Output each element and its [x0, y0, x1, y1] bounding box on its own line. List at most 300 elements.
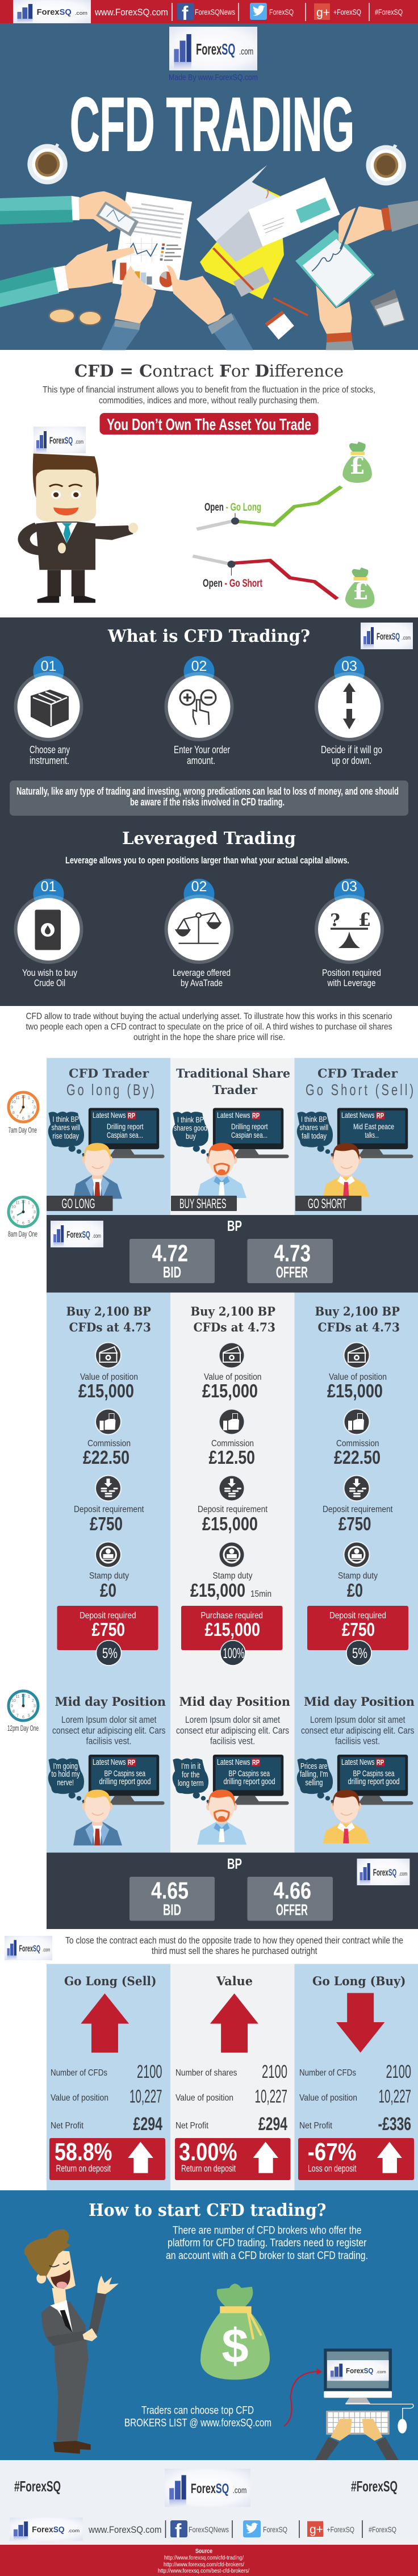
- loss callout: -67%: [308, 2138, 357, 2166]
- heading: How to start CFD trading?: [89, 2201, 326, 2220]
- column: CFD go short costs: £22.50: [334, 1447, 381, 1468]
- midday column 3: Latest News: [341, 1758, 375, 1767]
- column: traditional costs: £15,000: [202, 1513, 258, 1534]
- heading: leveraged trading: Leveraged Trading: [122, 829, 296, 849]
- logo: ForexSQ: [66, 1229, 90, 1240]
- column: traditional costs: CFDs at 4.73: [193, 1320, 275, 1334]
- midday column 3: Mid day Position: [304, 1694, 415, 1709]
- broker text: platform for CFD trading. Traders need to register: [168, 2237, 367, 2249]
- midday column 2: consect etur adipiscing elit. Cars: [176, 1725, 289, 1736]
- midday column 2: [173, 1694, 290, 1844]
- icon: twitter: [243, 2520, 261, 2537]
- BP price band: 4.65 / 4.66: [47, 1853, 418, 1929]
- hashtag: #ForexSQ: [369, 2525, 396, 2534]
- midday column 3: drilling report good: [348, 1777, 400, 1786]
- source bar: http://www.forexsq.com/best-cfd-brokers/: [158, 2567, 249, 2574]
- leverage step 1: crude oil: You wish to buy: [22, 968, 78, 978]
- midday column 2: Lorem Ipsum dolor sit amet: [185, 1714, 280, 1725]
- risk note: [10, 780, 408, 816]
- bid box: BID: [163, 1901, 181, 1919]
- clock: 7am: 3: [34, 1105, 36, 1110]
- icon: google plus: g+: [310, 2523, 323, 2536]
- results column 3: Go Long (Buy): [312, 1974, 406, 1988]
- bid box: [129, 1877, 215, 1921]
- step 2: order amount: 02: [191, 658, 207, 674]
- column heading: CFD trader go long: CFD Trader: [69, 1066, 149, 1080]
- scenario text: outright in the hope the share price will rise.: [133, 1033, 285, 1042]
- midday column 1: nerve!: [57, 1778, 74, 1788]
- scene: buy shares at 7am: [171, 1108, 289, 1212]
- icon: facebook: f: [175, 2520, 182, 2542]
- leverage step 2: scales: Leverage offered: [173, 968, 231, 978]
- clock: 12pm: 10: [11, 1699, 16, 1703]
- panel: how to start: [0, 2190, 418, 2460]
- google handle: +ForexSQ: [327, 2525, 354, 2534]
- column: CFD go long costs: CFDs at 4.73: [69, 1320, 151, 1334]
- scene: buy shares at 7am: shares good: [174, 1124, 207, 1133]
- scene: buy shares at 7am: Drilling report: [231, 1122, 268, 1131]
- logo: ForexSQ: [196, 40, 235, 58]
- clock: 7am: [8, 1092, 38, 1134]
- call to action text: Traders can choose top CFD: [141, 2405, 254, 2416]
- column heading: CFD trader go long: [66, 1066, 154, 1099]
- icon: stamp duty: [343, 1542, 370, 1568]
- midday column 2: long term: [178, 1779, 203, 1788]
- results column 1: 2100: [137, 2061, 162, 2082]
- column: CFD go long costs: Buy 2,100 BP: [66, 1304, 151, 1318]
- midday column 3: falling, I'm: [300, 1770, 328, 1779]
- column: CFD go short costs: Value of position: [329, 1372, 387, 1382]
- purchase callout: 100%: [223, 1646, 244, 1661]
- logo: ForexSQ: [377, 631, 400, 642]
- clock: 7am: 12: [21, 1095, 26, 1099]
- midday column 3: [297, 1694, 415, 1843]
- icon: deposit requirement: [218, 1475, 245, 1502]
- offer box: [248, 1239, 333, 1283]
- scene: buy shares at 7am: I think BP: [177, 1115, 204, 1124]
- column: CFD go long costs: £0: [100, 1580, 116, 1601]
- results column 1: £294: [133, 2114, 162, 2134]
- step 2: order amount: Enter Your order: [174, 744, 230, 755]
- leverage step 3: position balance: 03: [341, 879, 357, 895]
- column heading: traditional share trader: [176, 1066, 290, 1097]
- results column 3: [298, 1974, 414, 2180]
- logo: [357, 1859, 409, 1885]
- icon: commission: [95, 1409, 122, 1435]
- logo: ForexSQ: [49, 435, 73, 446]
- midday column 3: facilisis vest.: [335, 1736, 380, 1746]
- midday column 2: Latest News: [217, 1758, 250, 1767]
- website: www.ForexSQ.com: [88, 2524, 161, 2535]
- midday column 1: [48, 1694, 166, 1846]
- clock: 8am: 6: [22, 1221, 24, 1226]
- loss callout: Loss on deposit: [308, 2163, 357, 2174]
- scene: go short at 7am: Latest News: [341, 1110, 375, 1120]
- scene: go short at 7am: shares will: [300, 1122, 328, 1132]
- return callout: 3.00%: [179, 2138, 237, 2166]
- scene: go long at 7am: RP: [128, 1111, 135, 1120]
- footer logo: ForexSQ: [32, 2525, 65, 2535]
- midday column 1: I'm going: [53, 1762, 78, 1771]
- column: CFD go long costs: [57, 1304, 158, 1665]
- step 1: choose instrument: Choose any: [30, 744, 70, 755]
- scene: go long at 7am: shares will: [51, 1122, 80, 1132]
- column heading: CFD trader go short: CFD Trader: [317, 1066, 398, 1080]
- step 2: order amount: [166, 656, 232, 766]
- heading: What is CFD Trading?: [107, 627, 310, 646]
- results column 1: [49, 1974, 165, 2180]
- clock: 12pm: 8: [12, 1710, 15, 1714]
- hero illustration: desk with hands and documents: [0, 143, 418, 350]
- column: CFD go short costs: £15,000: [327, 1380, 383, 1401]
- clock: 12pm: 4: [32, 1710, 34, 1714]
- footer logo: [10, 2517, 83, 2541]
- icon: google plus: [314, 3, 330, 20]
- clock: 8am: 3: [34, 1210, 36, 1214]
- facebook handle: ForexSQNews: [189, 2525, 229, 2534]
- clock: 8am: [8, 1197, 38, 1238]
- offer box: 4.66: [274, 1877, 311, 1904]
- column: CFD go short costs: £0: [347, 1580, 363, 1601]
- column: traditional costs: £12.50: [209, 1447, 255, 1468]
- intro text: This type of financial instrument allows you to benefit from the fluctuation in the price of stocks,: [43, 385, 375, 395]
- column: traditional costs: Value of position: [204, 1372, 261, 1382]
- icon: stamp duty: [95, 1542, 122, 1568]
- clock: 7am: 1: [28, 1096, 30, 1100]
- column: traditional costs: £15,000: [202, 1380, 258, 1401]
- scene: go short at 7am: I think BP: [301, 1114, 327, 1124]
- return callout: [49, 2138, 165, 2180]
- midday column 1: RP: [128, 1758, 135, 1767]
- bid box: 4.65: [151, 1877, 189, 1904]
- deposit callout: Deposit required: [80, 1611, 136, 1621]
- clock: 8am: 10: [11, 1205, 16, 1209]
- scene: go short at 7am: RP: [377, 1111, 384, 1120]
- column: CFD go short costs: Commission: [336, 1439, 379, 1448]
- heading: CFD = Contract For Difference: [74, 361, 344, 381]
- line chart: go short: [193, 556, 375, 608]
- BP price band: 4.65 / 4.66: BP: [227, 1855, 242, 1872]
- twitter handle: ForexSQ: [269, 8, 294, 16]
- clock: 8am: 2: [32, 1205, 34, 1209]
- facebook handle: ForexSQNews: [195, 8, 235, 16]
- logo: [13, 0, 91, 23]
- icon: commission: [343, 1409, 370, 1435]
- step 1: choose instrument: instrument.: [30, 755, 69, 766]
- money bag: [200, 2283, 270, 2379]
- icon: commission: [218, 1409, 245, 1435]
- source bar: http://www.forexsq.com/cfd-brokers/: [164, 2561, 244, 2568]
- line chart: go long: £: [349, 453, 365, 479]
- scene: long term: [173, 1755, 289, 1844]
- clock: 12pm: 2: [32, 1699, 34, 1703]
- midday column 2: RP: [252, 1758, 260, 1767]
- arrow down: [336, 1993, 384, 2053]
- return callout: 58.8%: [55, 2138, 112, 2166]
- results column 2: Number of shares: [175, 2068, 237, 2078]
- logo: .com: [402, 635, 411, 641]
- clock: 7am: 2: [32, 1100, 34, 1104]
- twitter handle: ForexSQ: [263, 2525, 287, 2534]
- source bar: http://www.forexsq.com/cfd-trading/: [164, 2554, 244, 2561]
- logo: ForexSQ: [191, 2481, 229, 2496]
- bid box: [129, 1239, 215, 1283]
- icon: deposit requirement: [343, 1475, 370, 1502]
- call to action text: [124, 2405, 271, 2429]
- deposit callout: [57, 1606, 158, 1665]
- scene: go long at 7am: I think BP: [52, 1114, 79, 1124]
- bid box: BID: [163, 1263, 181, 1281]
- clock: 8am: 9: [11, 1210, 13, 1214]
- column: CFD go short costs: [307, 1304, 408, 1665]
- midday column 1: Mid day Position: [55, 1694, 166, 1709]
- clock: 12pm: [7, 1691, 39, 1732]
- clock: 7am: 10: [11, 1100, 16, 1104]
- column: CFD go long costs: Commission: [87, 1439, 131, 1448]
- midday column 2: BP Caspins sea: [228, 1769, 270, 1778]
- scene: go long at 7am: Latest News: [93, 1110, 126, 1120]
- results column 1: Go Long (Sell): [64, 1974, 157, 1988]
- leverage step 2: scales: by AvaTrade: [181, 978, 223, 988]
- icon: value of position: [95, 1342, 122, 1369]
- line chart: go long: [197, 441, 372, 529]
- logo: .com: [43, 1947, 50, 1952]
- logo: .com: [239, 46, 253, 57]
- leverage step 3: position balance: £: [358, 909, 371, 930]
- column: traditional costs: [181, 1304, 283, 1665]
- leverage step 2: scales: [166, 879, 232, 988]
- midday column 1: consect etur adipiscing elit. Cars: [52, 1725, 166, 1736]
- logo: .com: [233, 2486, 246, 2495]
- top social bar: [0, 0, 418, 24]
- clock: 7am: 9: [11, 1105, 13, 1110]
- panel: what is CFD trading: [0, 617, 418, 1006]
- line chart: go long: Open - Go Long: [204, 502, 261, 513]
- column heading: traditional share trader: Trader: [212, 1083, 258, 1097]
- return callout: Return on deposit: [56, 2163, 111, 2174]
- midday column 1: to hold my: [51, 1770, 80, 1779]
- money bag: $: [221, 2319, 249, 2373]
- clock: 8am: 5: [28, 1220, 30, 1224]
- bid box: 4.72: [152, 1239, 188, 1267]
- results column 1: Net Profit: [51, 2121, 83, 2131]
- leverage step 3: position balance: [316, 879, 382, 988]
- logo: [169, 27, 257, 70]
- scene: buy shares at 7am: Caspian sea...: [231, 1130, 267, 1139]
- icon: stamp duty: [218, 1542, 245, 1568]
- results column 2: Value: [216, 1974, 253, 1988]
- clock: 8am: 1: [28, 1201, 30, 1205]
- midday column 1: Latest News: [93, 1758, 126, 1767]
- computer with logo: ForexSQ: [346, 2367, 373, 2375]
- step 2: order amount: amount.: [187, 755, 215, 766]
- source bar: Source: [195, 2548, 212, 2555]
- midday column 2: Mid day Position: [179, 1694, 290, 1709]
- offer box: 4.73: [274, 1239, 311, 1267]
- icon: deposit requirement: [95, 1475, 122, 1502]
- scene: buy shares at 7am: RP: [252, 1111, 260, 1120]
- column: traditional costs: £15,000: [190, 1580, 245, 1601]
- midday column 2: facilisis vest.: [210, 1736, 255, 1746]
- column: CFD go long costs: Value of position: [80, 1372, 138, 1382]
- computer with logo: .com: [376, 2370, 386, 2374]
- callout banner: You Don’t Own The Asset You Trade: [107, 416, 311, 434]
- scene: go short at 7am: Mid East peace: [353, 1122, 394, 1131]
- broker text: There are number of CFD brokers who offer the: [173, 2224, 361, 2237]
- website: www.ForexSQ.com: [94, 7, 168, 18]
- BP price band: 4.72 / 4.73: [47, 1215, 418, 1293]
- scene: go short at 7am: GO SHORT: [308, 1196, 346, 1212]
- comparison column backgrounds: [47, 1058, 418, 2190]
- column: traditional costs: Stamp duty: [212, 1571, 253, 1581]
- column: CFD go long costs: £22.50: [83, 1447, 129, 1468]
- clock: 7am: 5: [28, 1116, 30, 1119]
- column: traditional costs: Deposit requirement: [198, 1505, 268, 1514]
- clock: 7am: 4: [32, 1111, 34, 1115]
- purchase callout: [181, 1606, 283, 1665]
- column: CFD go short costs: Deposit requirement: [323, 1505, 393, 1514]
- column: CFD go short costs: Buy 2,100 BP: [315, 1304, 400, 1318]
- footer logo: .com: [68, 2528, 80, 2533]
- hero panel: [0, 0, 418, 350]
- scene: go long at 7am: [47, 1108, 165, 1212]
- results column 2: Value of position: [175, 2093, 233, 2103]
- scene: go short at 7am: talks...: [365, 1130, 379, 1139]
- icon: facebook: f: [182, 3, 189, 24]
- clock: 8am: 11: [15, 1201, 20, 1205]
- results column 3: Number of CFDs: [299, 2068, 356, 2078]
- purchase callout: £15,000: [204, 1619, 260, 1640]
- logo: ForexSQ: [37, 7, 72, 17]
- results column 3: Value of position: [299, 2093, 357, 2103]
- return callout: Return on deposit: [181, 2163, 236, 2174]
- column: CFD go long costs: £750: [90, 1513, 123, 1534]
- broker text: an account with a CFD broker to start CFD trading.: [166, 2250, 368, 2262]
- scene: buy shares at 7am: BUY SHARES: [179, 1196, 226, 1212]
- midday column 1: BP Caspins sea: [104, 1769, 146, 1778]
- results column 2: [175, 1974, 291, 2180]
- arrow up: [210, 1993, 258, 2053]
- column: traditional costs: 15min: [250, 1589, 271, 1599]
- computer with logo: [315, 2349, 413, 2460]
- source bar: [0, 2545, 418, 2576]
- cartoon businessman: [24, 453, 138, 603]
- hashtag left: #ForexSQ: [14, 2478, 61, 2495]
- clock: 7am: 6: [22, 1117, 24, 1121]
- clock: 12pm: 3: [34, 1704, 36, 1709]
- clock: 12pm: 6: [22, 1715, 24, 1719]
- results column 1: Number of CFDs: [51, 2068, 107, 2078]
- midday column 1: Lorem Ipsum dolor sit amet: [61, 1714, 157, 1725]
- results column 2: £294: [258, 2114, 287, 2134]
- leverage step 1: crude oil: 01: [41, 879, 56, 895]
- column: CFD go short costs: CFDs at 4.73: [318, 1320, 400, 1334]
- line chart: go short: £: [353, 578, 369, 605]
- column heading: CFD trader go short: Go Short (Sell): [306, 1082, 413, 1099]
- clock: 7am: 7am Day One: [8, 1125, 37, 1134]
- clock: 12pm: 12: [21, 1694, 26, 1698]
- logo: .com: [75, 10, 87, 16]
- leverage step 3: position balance: ?: [330, 911, 340, 930]
- closing text: [65, 1935, 403, 1956]
- clock: 12pm: 11: [15, 1695, 20, 1699]
- midday column 1: facilisis vest.: [86, 1736, 132, 1746]
- column heading: CFD trader go long: Go long (By): [66, 1082, 154, 1099]
- clock: 7am: 11: [15, 1096, 20, 1100]
- column: CFD go long costs: Deposit requirement: [74, 1505, 144, 1514]
- clock: 8am: 4: [32, 1216, 34, 1220]
- step 3: direction: 03: [341, 658, 357, 674]
- icon: facebook: [177, 3, 194, 24]
- clock: 12pm: 5: [28, 1714, 30, 1718]
- deposit callout: 5%: [352, 1646, 367, 1661]
- logo: [165, 2469, 250, 2507]
- offer box: OFFER: [276, 1263, 308, 1281]
- column: CFD go long costs: Stamp duty: [89, 1571, 129, 1581]
- logo: [361, 623, 413, 649]
- deposit callout: 5%: [102, 1646, 118, 1661]
- scene: go long at 7am: Drilling report: [107, 1122, 144, 1131]
- arrow to computer: [284, 2368, 322, 2426]
- clock: 12pm: 7: [16, 1714, 19, 1718]
- scene: buy shares at 7am: buy: [186, 1132, 196, 1141]
- logo: .com: [93, 1233, 101, 1239]
- results column 1: Value of position: [51, 2093, 108, 2103]
- intro text: commodities, indices and more, without really purchasing them.: [99, 396, 319, 406]
- step 1: choose instrument: [16, 656, 82, 766]
- leverage step 3: position balance: Position required: [322, 968, 381, 978]
- closing text: third must sell the shares he purchased outright: [152, 1945, 317, 1956]
- purchase callout: Purchase required: [201, 1611, 263, 1621]
- icon: value of position: [218, 1342, 245, 1369]
- callout banner: [100, 413, 318, 435]
- risk note: be aware if the risks involved in CFD trading.: [130, 796, 285, 808]
- midday column 3: RP: [377, 1758, 384, 1767]
- deposit callout: £750: [92, 1619, 125, 1640]
- column: traditional costs: Commission: [211, 1439, 254, 1448]
- broker text: [166, 2224, 368, 2262]
- scene: go long at 7am: GO LONG: [61, 1196, 95, 1212]
- step 3: direction: up or down.: [332, 755, 371, 766]
- results column 2: 2100: [262, 2061, 287, 2082]
- made by line: Made By www.ForexSQ.com: [169, 73, 258, 82]
- BP price band: 4.72 / 4.73: BP: [227, 1217, 242, 1234]
- scene: go short at 7am: fall today: [302, 1132, 327, 1141]
- deposit callout: Deposit required: [329, 1611, 386, 1621]
- footer: [0, 2460, 418, 2545]
- logo: [34, 427, 86, 453]
- clock: 8am: 12: [21, 1200, 26, 1204]
- return callout: [175, 2138, 291, 2180]
- results column 1: 10,227: [129, 2086, 162, 2106]
- offer box: [248, 1877, 333, 1921]
- column: CFD go short costs: £750: [338, 1513, 371, 1534]
- logo: .com: [75, 439, 83, 445]
- midday column 3: Prices are: [300, 1762, 327, 1771]
- midday column 2: drilling report good: [224, 1777, 275, 1786]
- call to action text: BROKERS LIST @ www.forexSQ.com: [124, 2418, 271, 2429]
- google handle: +ForexSQ: [333, 8, 361, 16]
- midday column 2: for the: [182, 1771, 200, 1780]
- column: traditional costs: Buy 2,100 BP: [191, 1304, 275, 1318]
- column: CFD go short costs: Stamp duty: [338, 1571, 378, 1581]
- midday column 3: selling: [306, 1778, 323, 1788]
- line chart: go short: Open - Go Short: [203, 578, 262, 590]
- leverage step 3: position balance: with Leverage: [327, 978, 376, 988]
- step 3: direction: Decide if it will go: [321, 744, 382, 755]
- scene: hold nerve: [48, 1755, 165, 1846]
- clock: 12pm: 12pm Day One: [7, 1723, 39, 1732]
